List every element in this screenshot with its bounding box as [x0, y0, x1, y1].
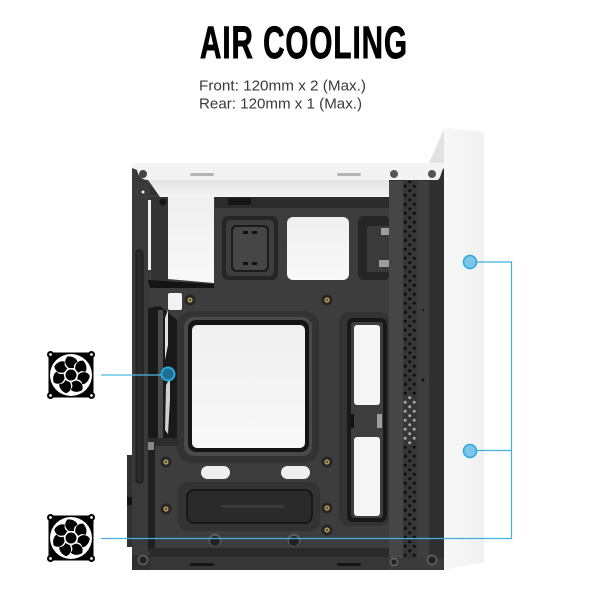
right recessed square	[358, 216, 390, 280]
left rear column	[127, 168, 168, 555]
recessed square with mounting slots	[222, 216, 278, 280]
specification text	[199, 78, 366, 112]
white front panel	[429, 128, 484, 570]
top white rail	[132, 163, 444, 197]
standoff screws	[160, 294, 332, 536]
bottom rail	[150, 548, 390, 570]
cable tie mount	[228, 198, 251, 205]
grommet holes	[208, 534, 300, 546]
rear fan and front panel callout lines	[101, 256, 512, 538]
large motherboard cutout	[177, 311, 319, 463]
icon: front fan	[47, 351, 95, 399]
case fan side view	[148, 306, 178, 450]
lower callout dot	[464, 444, 476, 458]
specification text: Rear: 120mm x 1 (Max.)	[199, 96, 362, 112]
square window	[287, 217, 349, 280]
oval holes	[201, 466, 310, 479]
case chassis	[127, 163, 444, 570]
specification text: Front: 120mm x 2 (Max.)	[199, 78, 366, 94]
icon: rear fan	[47, 514, 95, 562]
drive bay opening	[168, 197, 214, 283]
rear back panel	[150, 195, 390, 557]
right pillar with perforated strip	[389, 168, 444, 570]
drive bay shelf	[148, 280, 214, 288]
title: AIR COOLING	[200, 17, 408, 68]
right vertical cutouts	[339, 312, 390, 526]
bottom corner screws	[138, 556, 436, 566]
front fan callout line	[101, 368, 174, 380]
top panel band	[215, 197, 390, 208]
upper callout dot	[464, 256, 476, 268]
lower embossed panel	[178, 482, 320, 531]
